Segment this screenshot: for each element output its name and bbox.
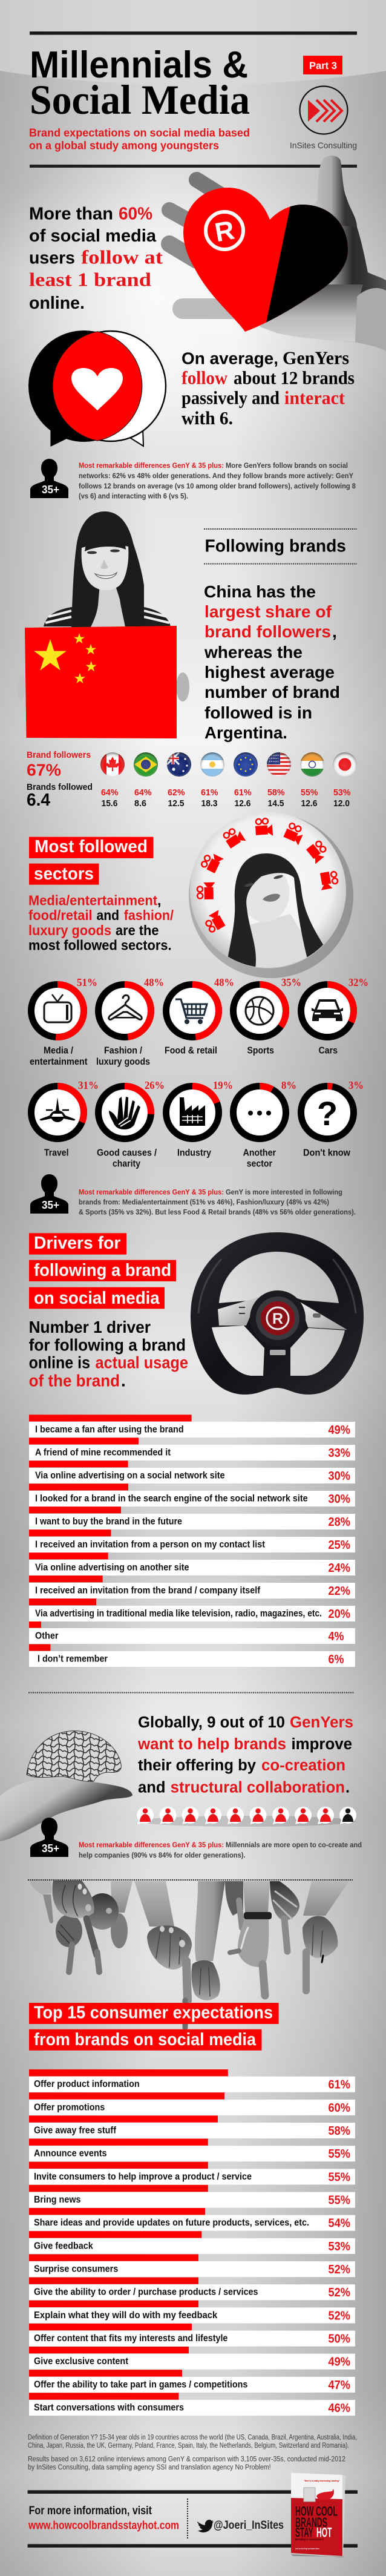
note: co-creation differences: Most remarkable differences GenY & 35 plus: [79, 1841, 224, 1849]
part badge: Part 3 [309, 60, 337, 71]
text: number 1 driver [29, 1318, 188, 1390]
ring: another sector 8% [234, 1079, 296, 1169]
row 7: 54% [328, 2217, 350, 2230]
ring: food and retail 48%: 48% [214, 976, 234, 988]
ring: sports 35%: 35% [281, 976, 301, 988]
heading: following brands [204, 529, 357, 564]
China stats: 6.4 [27, 790, 50, 810]
text: methodology: Results based on 3,612 online interviews among GenY & comparison with 3,105 over-35s, conducted mid-2012 [28, 2456, 345, 2463]
book: How Cool Brands Stay Hot: STAY [295, 2525, 313, 2540]
row 4 [29, 2139, 355, 2161]
row 9: 52% [328, 2263, 350, 2276]
ring: food and retail 48% [165, 976, 234, 1056]
icon: 35+ person [30, 1174, 68, 1214]
stat: more than 60%: follow at [81, 246, 163, 268]
country figures: 12.6 [235, 798, 250, 809]
book: How Cool Brands Stay Hot: BRANDS [295, 2515, 327, 2530]
ring: fashion 48% [96, 976, 164, 1067]
footer: twitter handle: @Joeri_InSites [214, 2519, 284, 2532]
logo: InSites Consulting: InSites Consulting [290, 140, 357, 150]
part badge [303, 56, 342, 74]
note: differences GenY and 35 plus: follows 12 brands on average (vs 10 among older brand followers), actively following 8 [79, 482, 356, 490]
row: other site ad: 24% [328, 1562, 350, 1575]
row: social network ad: Via online advertising on a social network site [35, 1471, 225, 1480]
text: globally 9 out of 10: co-creation [261, 1757, 345, 1774]
text: China largest share: followed is in [204, 703, 312, 722]
text: China largest share: brand followers [204, 622, 331, 641]
ring: industry 19% [166, 1079, 233, 1158]
China stats [27, 750, 93, 810]
flag: Argentina [200, 752, 224, 777]
row 14: Offer the ability to take part in games / competitions [34, 2379, 247, 2390]
subtitle: on a global study among youngsters [29, 139, 219, 152]
stat: more than 60%: users [29, 249, 75, 268]
icon: twitter bird [197, 2520, 214, 2532]
row 7 [29, 2208, 355, 2231]
row 5 [29, 2162, 355, 2184]
row 12: 50% [328, 2333, 350, 2346]
chart: top 15 expectations [29, 2069, 355, 2416]
row 15: 46% [328, 2402, 350, 2415]
text: globally 9 out of 10: GenYers [290, 1714, 353, 1731]
flag: Brazil [134, 752, 158, 777]
stat: more than 60%: online. [29, 294, 85, 313]
icon: 35+ person: 35+ [42, 1842, 59, 1855]
heading: most followed sectors: sectors [34, 864, 94, 884]
text: China largest share: number of brand [204, 683, 340, 702]
subtitle [29, 126, 250, 152]
book: How Cool Brands Stay Hot: Branding to Generation Y [295, 2538, 324, 2541]
row 1 [29, 2069, 355, 2092]
row 6: 55% [328, 2194, 350, 2207]
row: buy in future: 28% [328, 1516, 350, 1529]
note: sector differences: & Sports (35% vs 32%). But less Food & Retail brands (48% vs 56% older generations). [79, 1208, 356, 1217]
ring: good causes 26%: Good causes / [97, 1148, 157, 1158]
ring: sports 35%: Sports [247, 1046, 274, 1056]
China stats: Brand followers [27, 750, 91, 760]
row: invite from contact: I received an invitation from a person on my contact list [35, 1540, 265, 1549]
row 13: 49% [328, 2356, 350, 2369]
country figures: 53% [333, 787, 351, 798]
row 12 [29, 2324, 355, 2347]
China stats: Brands followed [27, 782, 93, 792]
text: number 1 driver: . [121, 1372, 126, 1390]
registered mark hub [261, 1301, 295, 1335]
ring: don't know 3% [301, 1079, 364, 1158]
row 1: Offer product information [34, 2079, 140, 2089]
country figures: 58% [267, 787, 284, 798]
row 1: 61% [328, 2078, 350, 2092]
text: globally 9 out of 10: their offering by [138, 1757, 257, 1774]
row 2: 60% [328, 2101, 350, 2115]
text: most followed sectors: are the [116, 922, 159, 938]
subtitle: Brand expectations on social media based [29, 126, 250, 139]
book: How Cool Brands Stay Hot: Joeri Van den Bergh and Mattias Behrer [295, 2548, 319, 2550]
book: How Cool Brands Stay Hot: "Here's a really interesting reading" [304, 2480, 340, 2482]
row: social network ad: 30% [328, 1470, 350, 1483]
icon: 35+ person: 35+ [42, 1199, 59, 1211]
text: globally 9 out of 10: structural collaboration [171, 1779, 345, 1796]
stat: average brands followed: On average, [182, 349, 278, 368]
note: co-creation differences [79, 1841, 362, 1859]
country figures: 12.5 [168, 798, 184, 809]
chart: drivers for following a brand [29, 1414, 355, 1667]
note: differences GenY and 35 plus: More GenYers follow brands on social [226, 461, 348, 470]
country figures: 18.3 [201, 798, 218, 809]
ring: sports 35% [234, 976, 301, 1056]
row 8: 53% [328, 2240, 350, 2253]
left hand cluster [30, 1881, 132, 1972]
heading: top 15 expectations: Top 15 consumer expectations [34, 2003, 273, 2022]
heading: drivers: following a brand [34, 1261, 171, 1280]
row: friend recommended [29, 1438, 355, 1460]
row: became a fan [29, 1414, 355, 1438]
row 11: Explain what they will do with my feedback [34, 2310, 218, 2321]
flag: Canada [100, 752, 125, 777]
text: most followed sectors [28, 893, 174, 953]
text: methodology [28, 2434, 357, 2471]
note: sector differences: GenY is more interested in following [226, 1188, 342, 1196]
text: globally 9 out of 10: . [345, 1779, 350, 1796]
ring: cars 32% [301, 976, 368, 1056]
row: traditional media: 20% [328, 1608, 350, 1621]
note: sector differences: brands from: Media/entertainment (51% vs 46%), Fashion/luxury (48% vs 42%) [79, 1198, 329, 1206]
ring: fashion 48%: 48% [144, 976, 164, 988]
icons: 9 out of 10 people [137, 1807, 356, 1827]
heading: most followed sectors [29, 837, 154, 885]
shirt [44, 607, 171, 626]
row 8 [29, 2231, 355, 2254]
row: don't remember: I don’t remember [38, 1654, 108, 1664]
ring: media / entertainment 51%: Media / [44, 1046, 74, 1056]
ring: industry 19%: 19% [213, 1079, 233, 1091]
book: How Cool Brands Stay Hot: HOT [316, 2525, 332, 2540]
text: globally 9 out of 10 [137, 1714, 353, 1796]
stat: average brands followed: follow [182, 367, 228, 389]
illustration: brain on hand [0, 1731, 132, 1841]
row 13 [29, 2347, 355, 2370]
ring: another sector 8%: Another [243, 1148, 276, 1158]
note: differences GenY and 35 plus [79, 461, 356, 500]
row 9: Surprise consumers [34, 2264, 118, 2275]
header [29, 31, 357, 168]
row 2 [29, 2092, 355, 2115]
country figures: 8.6 [134, 798, 146, 809]
text: number 1 driver: online is [29, 1353, 90, 1372]
country figures: 15.6 [102, 798, 117, 809]
ring: good causes 26%: charity [113, 1159, 140, 1169]
row: social network ad [29, 1460, 355, 1484]
centre left hand [134, 1881, 192, 2028]
ring: another sector 8%: sector [247, 1159, 272, 1169]
icon: 35+ person [30, 459, 68, 498]
row 3: Give away free stuff [34, 2126, 117, 2135]
ring: good causes 26%: 26% [145, 1079, 165, 1091]
country figures: 12.6 [301, 798, 317, 809]
row 3: 58% [328, 2124, 350, 2138]
row 10: 52% [328, 2286, 350, 2299]
row 5: Invite consumers to help improve a product / service [34, 2172, 252, 2182]
note: co-creation differences: help companies (90% vs 84% for older generations). [79, 1851, 246, 1859]
ring: industry 19%: Industry [177, 1148, 211, 1158]
ring: don't know 3%: 3% [348, 1079, 364, 1091]
ring: travel 31%: 31% [78, 1079, 99, 1091]
row: invite from brand: I received an invitation from the brand / company itself [35, 1586, 261, 1595]
row: buy in future [29, 1506, 355, 1530]
text: number 1 driver: Number 1 driver [29, 1318, 151, 1336]
country figures: 64% [134, 787, 151, 798]
ring: don't know 3%: ? [317, 1094, 338, 1132]
ring: another sector 8%: 8% [281, 1079, 296, 1091]
row: invite from brand: 22% [328, 1585, 350, 1598]
row: other site ad: Via online advertising on another site [35, 1563, 189, 1572]
row: invite from contact [29, 1530, 355, 1552]
stat: average brands followed: about 12 brands [234, 367, 355, 389]
icon: overlapping speech bubbles with heart [28, 330, 166, 447]
heart with registered mark [183, 188, 348, 332]
text: most followed sectors: luxury goods [28, 922, 111, 938]
flag: European Union [234, 752, 258, 777]
note: sector differences [79, 1188, 356, 1217]
text: China largest share: China has the [204, 582, 316, 601]
registered mark hub: R [272, 1310, 283, 1327]
ring: media / entertainment 51% [30, 976, 97, 1067]
stat: more than 60%: 60% [119, 205, 152, 224]
country figures: 55% [301, 787, 318, 798]
heading: following brands: Following brands [204, 537, 346, 556]
text: China largest share: , [332, 622, 337, 641]
heading: most followed sectors: Most followed [34, 837, 148, 856]
stat: average brands followed [182, 347, 355, 429]
stat: more than 60%: More than [29, 205, 113, 224]
row 14 [29, 2370, 355, 2393]
China stats: 67% [27, 761, 61, 780]
text: China largest share: largest share of [204, 602, 332, 621]
row: search engine [29, 1484, 355, 1506]
flag: Australia [167, 752, 191, 777]
centre arm and fist [191, 1881, 225, 2000]
illustration: steering wheel [191, 1232, 364, 1395]
row 13: Give exclusive content [34, 2356, 128, 2367]
heading: drivers: on social media [34, 1289, 160, 1308]
stat: average brands followed: with 6. [182, 407, 233, 429]
row 11 [29, 2301, 355, 2323]
row: don't remember: 6% [328, 1653, 344, 1666]
row 7: Share ideas and provide updates on future products, services, etc. [34, 2218, 309, 2228]
country figures: 61% [201, 787, 218, 798]
heading: drivers: Drivers for [34, 1234, 120, 1253]
illustration: hands pointing down [30, 1881, 349, 2028]
icon: 35+ person [30, 1818, 68, 1857]
logo: InSites Consulting [290, 86, 357, 150]
text: China largest share: Argentina. [204, 723, 287, 742]
row 15: Start conversations with consumers [34, 2403, 184, 2413]
flag: India [300, 752, 324, 777]
book: How Cool Brands Stay Hot: HOW COOL [295, 2504, 338, 2519]
heart with registered mark: R [212, 215, 237, 248]
row: friend recommended: 33% [328, 1447, 350, 1460]
title [30, 44, 250, 123]
text: globally 9 out of 10: improve [292, 1736, 352, 1753]
row: other: Other [35, 1631, 58, 1641]
text: China largest share: whereas the [204, 643, 303, 662]
note: sector differences: Most remarkable differences GenY & 35 plus: [79, 1188, 224, 1196]
stat: more than 60%: least 1 brand [29, 269, 151, 291]
country figures: 12.0 [333, 798, 350, 809]
flag: Japan [333, 752, 357, 777]
footer: more information: www.howcoolbrandsstayhot.com [28, 2519, 179, 2532]
illustration: girl holding Chinese flag [17, 511, 189, 738]
stat: average brands followed: interact [284, 387, 345, 409]
country figures: 64% [101, 787, 119, 798]
row 9 [29, 2254, 355, 2277]
row: other [29, 1622, 355, 1644]
note: co-creation differences: Millennials are more open to co-create and [226, 1841, 362, 1849]
ring: cars 32%: 32% [348, 976, 368, 988]
row: don't remember [29, 1644, 355, 1667]
row 12: Offer content that fits my interests and lifestyle [34, 2333, 228, 2344]
ring: media / entertainment 51%: entertainment [30, 1057, 88, 1067]
text: globally 9 out of 10: want to help brands [137, 1736, 286, 1753]
row: other: 4% [328, 1630, 344, 1643]
ring: fashion 48%: luxury goods [96, 1057, 150, 1067]
row 4: 55% [328, 2147, 350, 2161]
row 5: 55% [328, 2170, 350, 2184]
row 4: Announce events [34, 2149, 107, 2159]
ring: cars 32%: Cars [318, 1046, 338, 1056]
book: How Cool Brands Stay Hot [291, 2473, 345, 2557]
stat: average brands followed: passively and [182, 387, 280, 409]
row: invite from brand [29, 1576, 355, 1598]
row: traditional media: Via advertising in traditional media like television, radio, magazines, etc. [35, 1609, 322, 1618]
row: buy in future: I want to buy the brand in the future [35, 1517, 182, 1526]
row 3 [29, 2115, 355, 2138]
chart: sector ring charts [30, 976, 368, 1169]
illustration: hand holding heart [169, 156, 386, 351]
row: other site ad [29, 1552, 355, 1576]
row: became a fan: I became a fan after using the brand [35, 1425, 184, 1434]
ring: travel 31%: Travel [44, 1148, 69, 1158]
text: methodology: by InSites Consulting, data sampling agency SSI and translation agency No Problem! [28, 2464, 271, 2471]
country figures: 62% [168, 787, 185, 798]
ring: fashion 48%: Fashion / [104, 1046, 142, 1056]
text: most followed sectors: food/retail [28, 907, 93, 923]
note: differences GenY and 35 plus: (vs 6) and interacting with 6 (vs 5). [79, 491, 188, 500]
ring: travel 31% [31, 1079, 99, 1158]
text: most followed sectors: , [157, 893, 161, 908]
text: globally 9 out of 10: and [138, 1779, 166, 1796]
ring: media / entertainment 51%: 51% [77, 976, 97, 988]
text: number 1 driver: actual usage [96, 1353, 188, 1372]
row: friend recommended: A friend of mine recommended it [35, 1448, 171, 1457]
title: Social Media [30, 77, 250, 123]
text: most followed sectors: Media/entertainment [28, 893, 157, 908]
footer: more information [28, 2505, 179, 2532]
row 11: 52% [328, 2309, 350, 2322]
row: traditional media [29, 1598, 355, 1622]
note: differences GenY and 35 plus: Most remarkable differences GenY & 35 plus: [79, 461, 224, 470]
country figures [101, 787, 351, 809]
ring: food and retail 48%: Food & retail [165, 1046, 217, 1056]
text: number 1 driver: for following a brand [29, 1336, 186, 1355]
text: China largest share [204, 582, 340, 742]
note: differences GenY and 35 plus: networks: 62% vs 48% older generations. And they follow brands more actively: GenY [79, 472, 353, 480]
illustration: plate with girl and film cameras [189, 812, 353, 978]
row 6: Bring news [34, 2195, 81, 2205]
text: China largest share: highest average [204, 663, 335, 682]
dark hand [270, 1881, 299, 1951]
row 10 [29, 2277, 355, 2300]
row 10: Give the ability to order / purchase products / services [34, 2287, 258, 2298]
footer: twitter handle [197, 2519, 284, 2532]
text: most followed sectors: most followed sectors. [28, 937, 172, 953]
row: search engine: I looked for a brand in the search engine of the social network site [35, 1494, 308, 1503]
ring: good causes 26% [97, 1079, 165, 1169]
footer: more information: For more information, visit [29, 2505, 152, 2517]
stat: average brands followed: GenYers [283, 347, 349, 369]
icon: 35+ person: 35+ [42, 484, 59, 496]
heading: top 15 expectations: from brands on social media [34, 2030, 257, 2049]
row 6 [29, 2185, 355, 2208]
stat: more than 60%: of social media [29, 226, 157, 246]
flags: country spheres [100, 752, 357, 777]
flag: USA [267, 752, 291, 777]
row: search engine: 30% [328, 1493, 350, 1506]
row: became a fan: 49% [328, 1424, 350, 1437]
stat: more than 60% [29, 205, 163, 313]
title: Millennials & [30, 44, 248, 86]
text: globally 9 out of 10: Globally, 9 out of 10 [138, 1714, 285, 1731]
text: number 1 driver: of the brand [29, 1372, 120, 1390]
country figures: 61% [234, 787, 252, 798]
flag of China [25, 626, 177, 738]
bracelet hand [225, 1881, 272, 1996]
country figures: 14.5 [267, 798, 284, 809]
row: invite from contact: 25% [328, 1539, 350, 1552]
row 2: Offer promotions [34, 2102, 105, 2112]
row 8: Give feedback [34, 2241, 93, 2251]
ring: don't know 3%: Don't know [303, 1148, 350, 1158]
right hand [303, 1881, 349, 1991]
text: most followed sectors: fashion/ [124, 907, 174, 923]
row 15 [29, 2393, 355, 2416]
heading: top 15 expectations [29, 2003, 279, 2051]
heading: drivers [29, 1233, 176, 1309]
row 14: 47% [328, 2379, 350, 2392]
text: most followed sectors: and [97, 907, 119, 923]
